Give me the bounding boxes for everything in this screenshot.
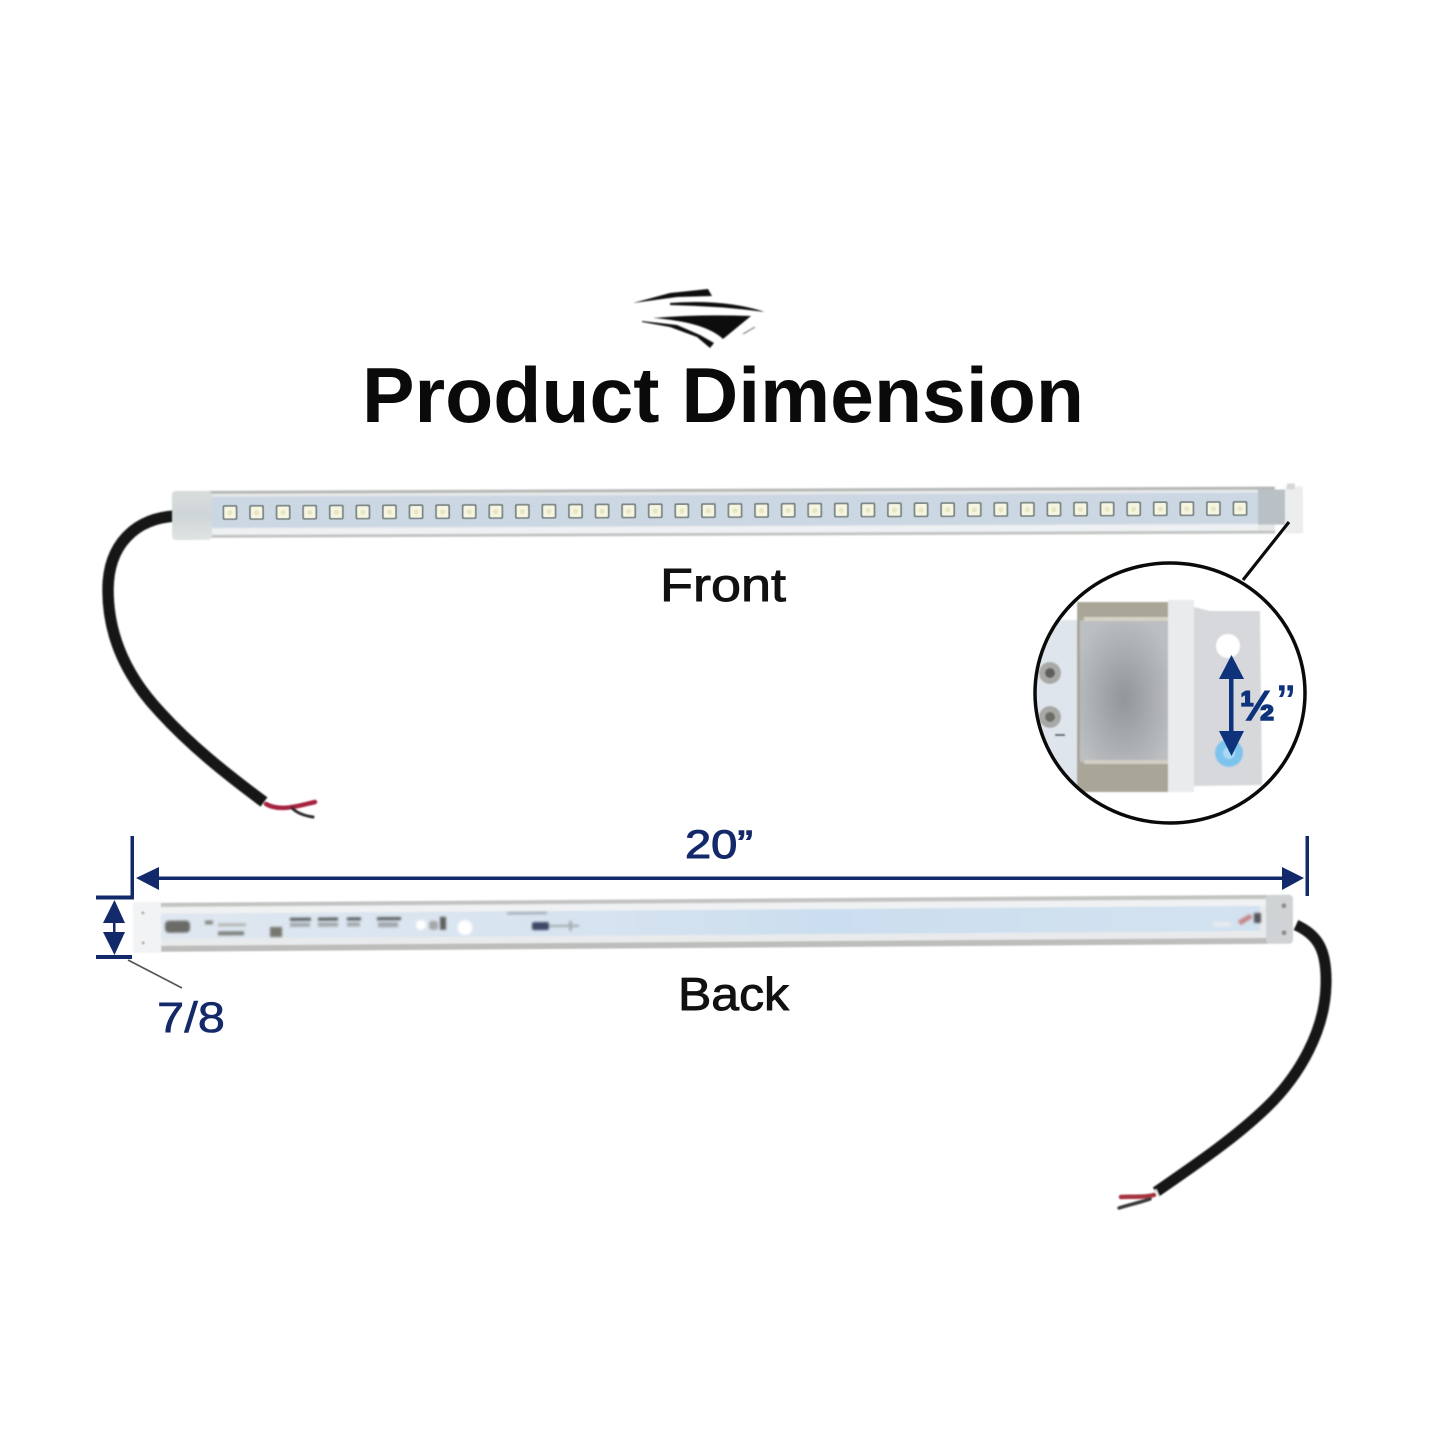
LED bar: back view [133, 894, 1293, 953]
icon: brand logo [633, 289, 765, 348]
right end cap [1258, 483, 1303, 534]
width label: 7/8 [157, 994, 225, 1042]
title: Product Dimension [362, 351, 1084, 439]
cable: back view [1119, 925, 1326, 1208]
cable: front view [108, 516, 315, 817]
PCB strip [1036, 620, 1078, 784]
right end components [1213, 913, 1261, 926]
length label: 20” [685, 823, 753, 867]
dimension: 20 inch length [130, 823, 1309, 898]
circuit board components [165, 907, 1261, 938]
infographic: product dimension diagram [96, 288, 1333, 1211]
callout leader line [1243, 522, 1289, 580]
LED row [217, 499, 1254, 523]
dimension label: one half inch: ½ [1240, 682, 1275, 729]
right end tab [1266, 895, 1293, 944]
wire ends: front cable [266, 802, 315, 817]
LED bar: front view [172, 483, 1303, 540]
label: Front: Front [660, 559, 786, 611]
dimension arrow: hole spacing [1219, 655, 1244, 756]
dimension label: inch mark: ” [1276, 676, 1296, 723]
metal housing [1077, 602, 1169, 792]
white band [1168, 600, 1194, 792]
mounting tab [1194, 607, 1262, 786]
dimension: 7/8 inch width [96, 896, 225, 1042]
callout outline [1035, 563, 1305, 823]
callout: mounting tab close-up [1030, 563, 1305, 823]
wire ends: back cable [1119, 1190, 1159, 1208]
left end cap [172, 491, 212, 540]
left end tab [133, 902, 161, 953]
label: Back: Back [678, 968, 790, 1020]
